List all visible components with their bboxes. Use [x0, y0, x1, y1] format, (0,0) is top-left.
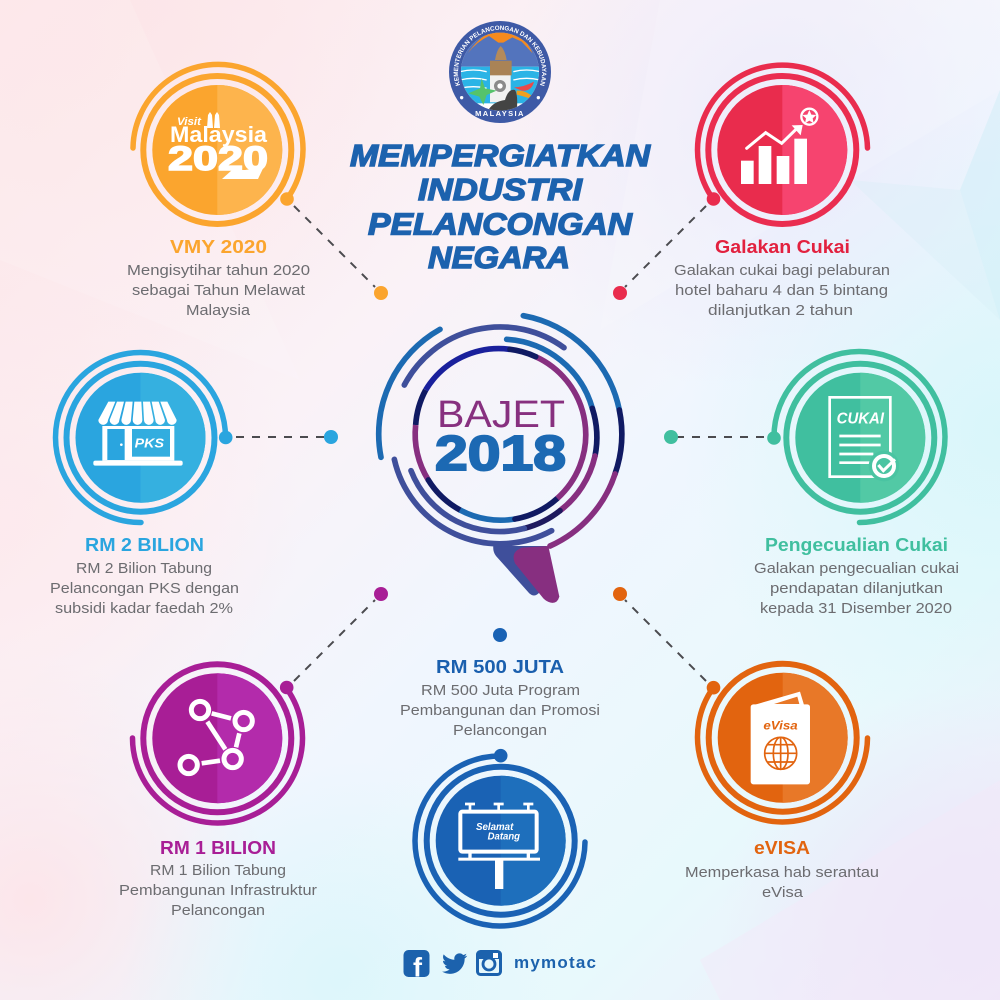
text block	[50, 560, 239, 617]
badge: orange	[133, 64, 303, 224]
heading: RM 1 BILION	[160, 838, 276, 858]
text block	[674, 262, 890, 319]
panel: RM 1 Bilion	[119, 664, 317, 919]
icon: Twitter	[442, 953, 467, 974]
text block: sebagai Tahun Melawat	[132, 282, 306, 299]
heading: Pengecualian Cukai	[765, 535, 948, 555]
handle: mymotac	[514, 953, 596, 972]
text block: RM 1 Bilion Tabung	[150, 862, 286, 879]
icon: passport	[751, 692, 810, 784]
icon: shop with awning	[93, 402, 183, 466]
text block	[400, 682, 600, 739]
panel: RM 500 Juta	[400, 657, 600, 926]
panel: RM 2 Bilion	[50, 353, 239, 617]
text block: eVisa	[762, 884, 804, 901]
icon: Visit Malaysia 2020 logo: Visit	[177, 116, 202, 128]
heading: RM 500 JUTA	[436, 657, 564, 677]
connector end dots	[324, 286, 678, 642]
icon: Visit Malaysia 2020 logo: Malaysia	[170, 122, 268, 147]
concentric arcs	[379, 316, 622, 546]
badge: red	[698, 65, 868, 224]
badge: dark orange	[698, 664, 868, 822]
title	[350, 138, 651, 275]
icon: Visit Malaysia 2020 logo: 2020	[168, 140, 268, 178]
text block: hotel baharu 4 dan 5 bintang	[675, 282, 888, 299]
bubble text: Bajet: BAJET	[437, 394, 565, 436]
text block: Galakan cukai bagi pelaburan	[674, 262, 890, 279]
text block: Malaysia	[186, 302, 251, 319]
text block	[685, 864, 879, 901]
panel: eVISA	[685, 664, 879, 901]
text block: RM 2 Bilion Tabung	[76, 560, 212, 577]
title: PELANCONGAN	[368, 206, 633, 242]
text block: Pelancongan	[453, 722, 547, 739]
text block: pendapatan dilanjutkan	[770, 580, 943, 597]
badge: blue	[415, 749, 585, 926]
text block	[119, 862, 317, 919]
text block: dilanjutkan 2 tahun	[708, 302, 853, 319]
crest ring text: KEMENTERIAN PELANCONGAN DAN KEBUDAYAAN	[454, 26, 546, 86]
text block: RM 500 Juta Program	[421, 682, 580, 699]
panel: Pengecualian Cukai	[754, 352, 959, 617]
bubble text: 2018: 2018	[435, 427, 566, 481]
badge: green	[767, 352, 945, 522]
crest country: MALAYSIA	[475, 109, 525, 118]
icon: Facebook: f	[413, 952, 423, 982]
bubble tail	[493, 546, 559, 603]
text block: Pelancongan	[171, 902, 265, 919]
text block: subsidi kadar faedah 2%	[55, 600, 233, 617]
heading: Galakan Cukai	[715, 237, 850, 257]
text block: Galakan pengecualian cukai	[754, 560, 959, 577]
icon: Visit Malaysia 2020 logo	[168, 112, 268, 179]
heading: RM 2 BILION	[85, 535, 204, 555]
icon: tax document with check: CUKAI	[837, 410, 885, 427]
crest artwork	[460, 32, 540, 112]
icon: Facebook	[404, 950, 430, 982]
icon: rising bar chart with star	[741, 109, 817, 184]
icon: shop with awning: PKS	[135, 436, 164, 451]
icon: passport: eVisa	[763, 718, 798, 732]
text block	[127, 262, 310, 319]
icon: billboard	[458, 803, 540, 889]
heading: VMY 2020	[170, 237, 267, 257]
icon: billboard: Selamat	[476, 822, 514, 833]
icon: Instagram	[478, 951, 500, 974]
logo: ministry crest	[449, 21, 551, 123]
text block: Mengisytihar tahun 2020	[127, 262, 310, 279]
panel: VMY 2020	[127, 64, 310, 319]
social footer	[404, 950, 596, 982]
title: NEGARA	[428, 240, 570, 275]
central speech bubble: Bajet 2018	[379, 316, 622, 603]
title: INDUSTRI	[418, 172, 584, 207]
text block: Pelancongan PKS dengan	[50, 580, 239, 597]
text block: Pembangunan dan Promosi	[400, 702, 600, 719]
title: MEMPERGIATKAN	[350, 138, 651, 173]
panel: Galakan Cukai	[674, 65, 890, 319]
text block: Memperkasa hab serantau	[685, 864, 879, 881]
icon: network nodes	[180, 701, 252, 774]
badge: light blue	[56, 353, 232, 523]
icon: tax document with check	[830, 397, 899, 481]
heading: eVISA	[754, 838, 810, 858]
text block: kepada 31 Disember 2020	[760, 600, 952, 617]
icon: billboard: Datang	[488, 831, 520, 842]
text block: Pembangunan Infrastruktur	[119, 882, 317, 899]
badge: purple	[132, 664, 302, 823]
connector lines	[236, 206, 764, 681]
text block	[754, 560, 959, 617]
